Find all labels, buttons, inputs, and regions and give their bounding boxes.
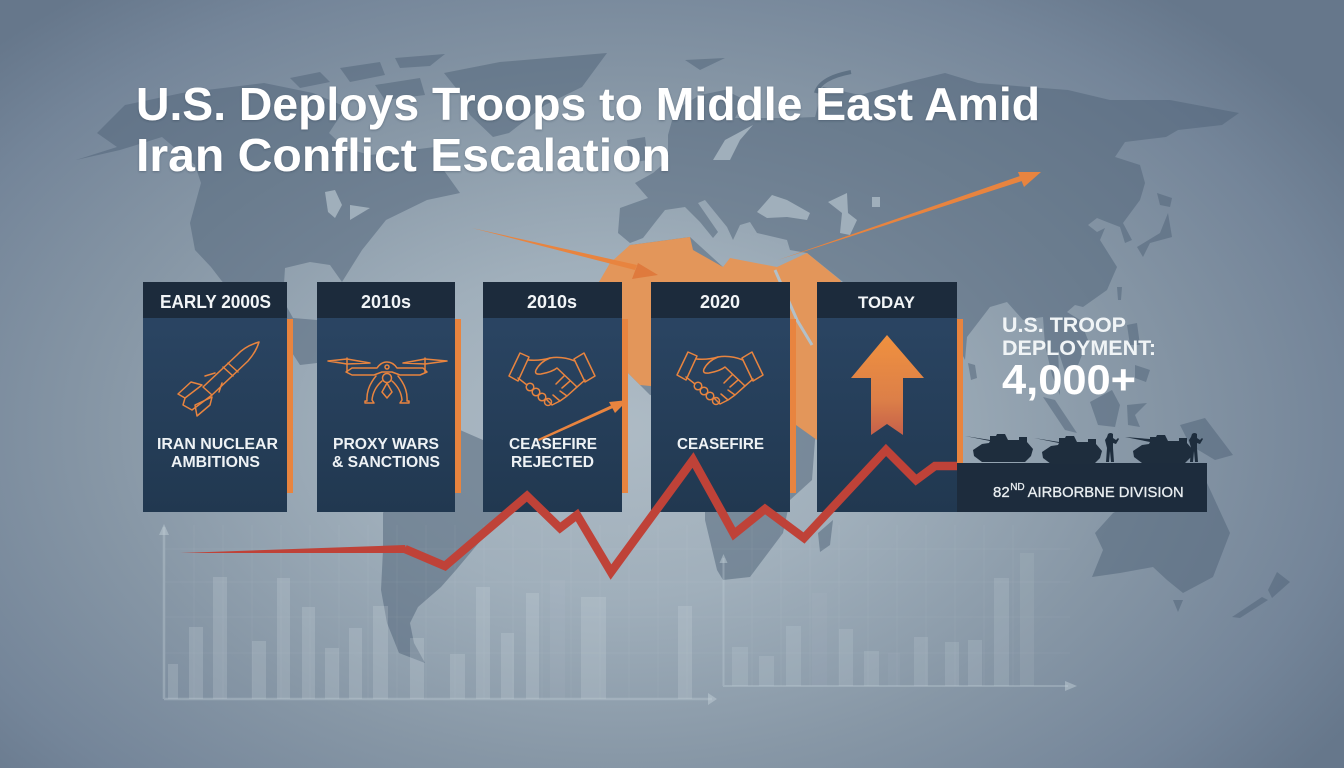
tank 2 xyxy=(1034,436,1102,464)
world map xyxy=(76,53,1290,663)
panel: 2010s ceasefire rejected xyxy=(483,282,622,512)
arrow: Middle East to East Asia xyxy=(778,172,1041,260)
heading: 2010s: 2010s xyxy=(527,292,577,312)
inland seas xyxy=(325,125,880,235)
label: Iran nuclear ambitions: AMBITIONS xyxy=(171,454,260,471)
heading: early 2000s: EARLY 2000S xyxy=(160,292,271,312)
heading: today: TODAY xyxy=(858,293,916,312)
chart: right bar chart xyxy=(720,553,1077,691)
label: division name: 82 xyxy=(993,484,1010,501)
icon: handshake xyxy=(677,352,763,404)
continent: Africa xyxy=(599,237,862,580)
islands xyxy=(627,58,1290,618)
label: ceasefire rejected xyxy=(509,436,597,471)
label: ceasefire rejected: REJECTED xyxy=(511,454,594,471)
label: ceasefire: CEASEFIRE xyxy=(677,436,764,453)
heading: 2020: 2020 xyxy=(700,292,740,312)
panel: 2010s proxy wars xyxy=(317,282,455,512)
Canadian Arctic islands xyxy=(290,54,445,100)
callout: troop deployment: U.S. TROOP xyxy=(1002,314,1126,337)
tank 3 xyxy=(1125,435,1193,463)
continent: Greenland xyxy=(444,53,607,137)
panel: early 2000s xyxy=(143,282,287,512)
label: division name: AIRBORBNE DIVISION xyxy=(1028,484,1184,501)
region: highlighted North Africa and Middle East xyxy=(599,237,862,440)
icon: tanks and soldiers silhouette xyxy=(965,433,1203,464)
icon: upward arrow xyxy=(851,335,924,435)
label: proxy wars and sanctions: & SANCTIONS xyxy=(332,454,440,471)
continent: South America xyxy=(381,430,520,663)
soldier 1 xyxy=(1105,433,1119,462)
continent: Australia xyxy=(1092,483,1230,593)
icon: missile xyxy=(178,342,259,416)
icon: drone xyxy=(328,358,447,403)
icon: handshake xyxy=(509,353,595,406)
label: ceasefire rejected: CEASEFIRE xyxy=(509,436,597,453)
panel: 82nd Airborne Division xyxy=(957,463,1207,512)
soldier 2 xyxy=(1189,433,1203,462)
callout: troop deployment: 4,000+ xyxy=(1002,356,1136,403)
label: proxy wars and sanctions: PROXY WARS xyxy=(333,436,439,453)
continent: North America xyxy=(76,83,460,365)
label: division name: ND xyxy=(1010,482,1025,493)
callout: troop deployment: DEPLOYMENT: xyxy=(1002,337,1156,360)
label: Iran nuclear ambitions xyxy=(157,436,278,471)
arrow: Atlantic to North Africa xyxy=(472,228,658,279)
panel: 2020 ceasefire xyxy=(651,282,790,512)
red escalation line xyxy=(180,450,957,572)
title: U.S. Deploys Troops to Middle East Amid xyxy=(136,78,1040,130)
label: Iran nuclear ambitions: IRAN NUCLEAR xyxy=(157,436,278,453)
callout: troop deployment xyxy=(1002,314,1156,403)
bracket bars xyxy=(287,319,963,493)
label: proxy wars and sanctions xyxy=(332,436,440,471)
heading: 2010s: 2010s xyxy=(361,292,411,312)
panel: today xyxy=(817,282,957,512)
continent: Eurasia xyxy=(618,73,1239,395)
title: Iran Conflict Escalation xyxy=(136,129,671,181)
title xyxy=(136,78,1040,181)
chart: left bar chart xyxy=(159,524,1070,705)
arrow: ceasefire rejected to Africa xyxy=(538,400,628,441)
tank 1 xyxy=(965,434,1033,462)
